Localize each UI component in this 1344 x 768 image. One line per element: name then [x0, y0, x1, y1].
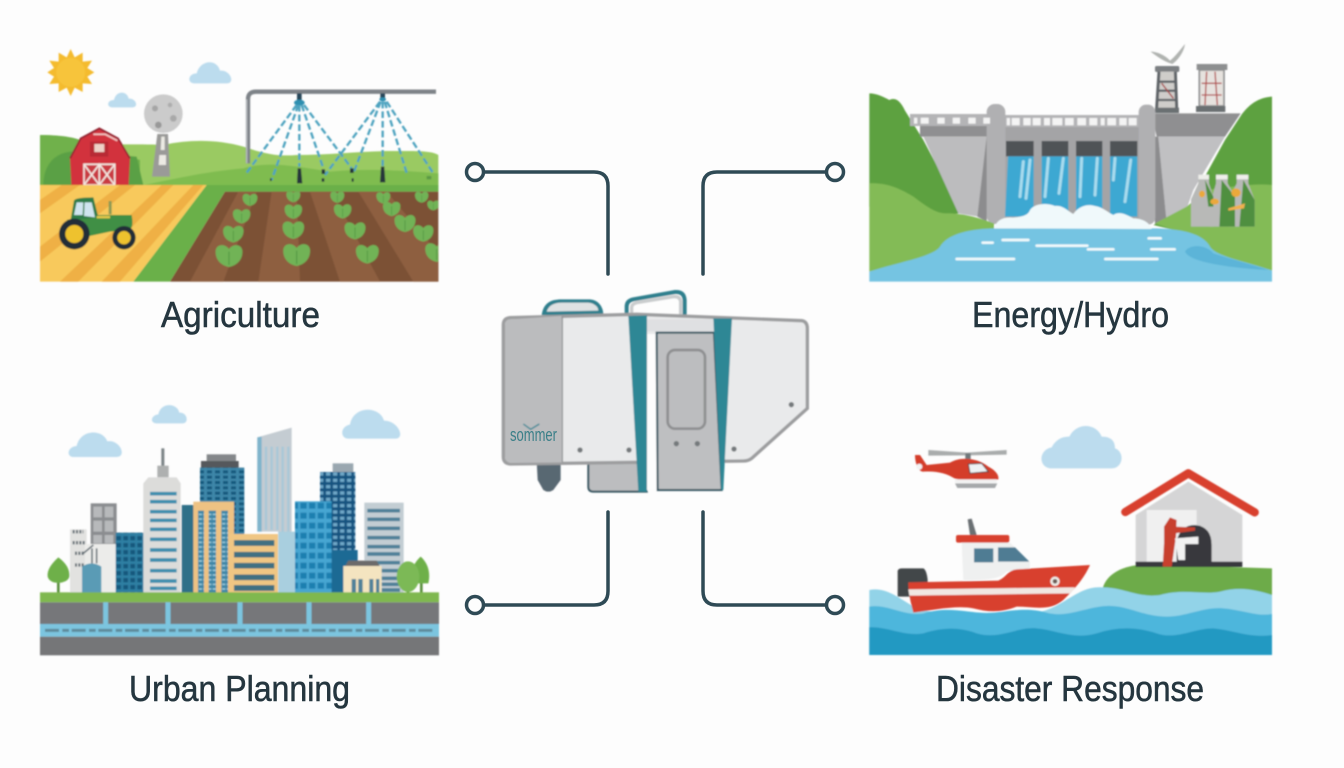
building: white tower	[143, 448, 181, 593]
road lower	[40, 637, 439, 655]
icon: transmission tower	[1196, 64, 1227, 112]
left bank light	[869, 183, 994, 272]
icon: cloud	[1041, 426, 1122, 468]
spillway gates	[1005, 141, 1137, 217]
icon: windmill	[144, 94, 183, 177]
icon: helicopter	[915, 450, 1007, 488]
lake shadow	[1185, 246, 1268, 270]
grass strip	[40, 592, 439, 602]
icon: trees	[48, 557, 429, 593]
icon: rescuer figure	[1163, 517, 1198, 567]
yellow field	[40, 185, 207, 282]
building: small white left	[70, 529, 87, 593]
front side panel	[505, 316, 562, 463]
green verge	[133, 185, 438, 282]
icon: sun	[47, 49, 94, 96]
irrigation risers	[270, 167, 431, 183]
right hill	[1153, 97, 1272, 253]
road upper	[40, 602, 439, 624]
icon: wind turbine tower	[1151, 44, 1185, 113]
carry handle	[627, 292, 685, 317]
irrigation sprays	[245, 102, 433, 180]
screws	[577, 402, 794, 453]
main housing	[503, 314, 807, 464]
icon: water tank	[82, 545, 101, 593]
heading: Urban Planning: Urban Planning	[129, 668, 350, 709]
building: gray	[85, 503, 117, 593]
connector: bottom right	[703, 512, 844, 614]
building: small cream	[343, 561, 382, 593]
water foam	[994, 204, 1152, 229]
top dome	[542, 299, 603, 315]
heading: Energy/Hydro: Energy/Hydro	[972, 294, 1169, 335]
island	[1103, 564, 1272, 597]
panel: energy/hydro illustration	[869, 44, 1272, 282]
icon: tractor	[59, 197, 136, 249]
waves light	[869, 587, 1272, 655]
dam structure	[910, 104, 1241, 225]
heading: Disaster Response: Disaster Response	[936, 668, 1204, 709]
icon: clouds	[69, 405, 400, 457]
brown soil rows	[170, 192, 438, 282]
icon: large cloud	[189, 62, 231, 83]
crop plants	[216, 191, 448, 267]
connector: top left	[466, 164, 608, 274]
left hill dark	[869, 93, 959, 217]
panel: urban planning illustration	[40, 405, 439, 655]
lower housings	[588, 460, 647, 492]
infographic canvas	[39, 44, 1274, 709]
right bank light	[1155, 185, 1272, 271]
waves mid	[869, 606, 1272, 655]
irrigation boom	[247, 92, 436, 163]
center gap	[647, 334, 657, 490]
icon: small cloud	[108, 93, 136, 107]
lens nozzle	[537, 462, 561, 492]
building: bright blue	[295, 501, 332, 593]
icon: red barn	[70, 128, 130, 185]
building: blue rear tower	[200, 454, 244, 534]
building: navy tower	[320, 463, 358, 593]
device logo: sommer	[510, 425, 557, 445]
connector: bottom left	[466, 512, 608, 614]
icon: house	[1125, 473, 1255, 567]
building: tan low	[229, 534, 278, 593]
lake ripples	[957, 238, 1175, 259]
lake	[869, 228, 1272, 282]
logo swoosh	[523, 424, 539, 429]
heading: Agriculture: Agriculture	[161, 294, 320, 335]
building: gray stripes	[364, 503, 404, 593]
connector: top right	[703, 164, 844, 274]
building: glass slanted tower	[257, 428, 295, 593]
building: dark teal	[182, 505, 194, 593]
background hills	[40, 135, 438, 192]
center door	[657, 333, 722, 490]
panel: disaster response illustration	[869, 426, 1272, 655]
teal straps	[628, 315, 732, 492]
building: blue grid left	[116, 533, 144, 593]
building: orange	[193, 502, 234, 593]
central device: scanner	[503, 292, 807, 492]
water main	[40, 624, 439, 637]
top bridge	[647, 319, 713, 331]
icon: rescue boat	[898, 519, 1090, 613]
icon: bottles	[1191, 175, 1255, 227]
panel: agriculture illustration	[40, 49, 448, 282]
waves deep	[869, 627, 1272, 655]
